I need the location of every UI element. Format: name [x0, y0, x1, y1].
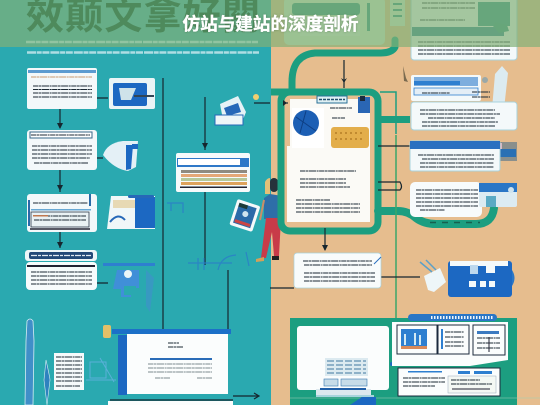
- icon: blue circle diagram: [292, 108, 324, 148]
- panel: dark bordered summary: [398, 368, 500, 396]
- icon: blue illustration: [103, 263, 155, 312]
- flow ribbon: green path: [271, 40, 494, 318]
- panel: step 1: [27, 68, 97, 109]
- subtitle line in band: [26, 41, 258, 43]
- blue sketch marks: [167, 203, 249, 270]
- icon: browser card: [109, 78, 155, 109]
- icon: yellow ruler card: [330, 108, 369, 148]
- connector lines: left column: [57, 78, 270, 331]
- panel: bottom green workspace: [290, 318, 540, 405]
- panel: right card note: [410, 182, 517, 217]
- panel: lower center note: [294, 253, 381, 288]
- arrows: right column: [270, 60, 420, 288]
- panel: center white document: [283, 96, 370, 222]
- panel: step 2: [27, 130, 97, 170]
- icon: faint blueprint: [86, 358, 116, 382]
- panel: three frame storyboard: [392, 314, 508, 366]
- panel: step 4: [25, 250, 97, 290]
- panel: right note: [411, 92, 517, 130]
- icon: layout sheet: [107, 195, 155, 229]
- panel: step 3: [27, 194, 97, 232]
- icon: device on desk: [215, 94, 259, 125]
- figure: person: [256, 178, 283, 262]
- icon: small phone card: [229, 199, 260, 232]
- header band overlay: [0, 0, 540, 47]
- figure: blue anatomy column: [25, 319, 50, 405]
- panel: base bar and report card: [103, 325, 259, 405]
- panel: right blue header note: [410, 141, 517, 171]
- icon: blue tablet: [420, 260, 514, 297]
- title: 仿站与建站的深度剖析: [183, 14, 358, 34]
- panel: central chart card: [176, 153, 250, 192]
- panel: top right article: [411, 0, 517, 60]
- panel: right card with bars: [411, 66, 508, 109]
- icon: open book: [103, 141, 138, 171]
- panel: faded top dashboard: [284, 0, 405, 45]
- panel: side note: [54, 353, 84, 390]
- subtitle line below band: [27, 51, 259, 54]
